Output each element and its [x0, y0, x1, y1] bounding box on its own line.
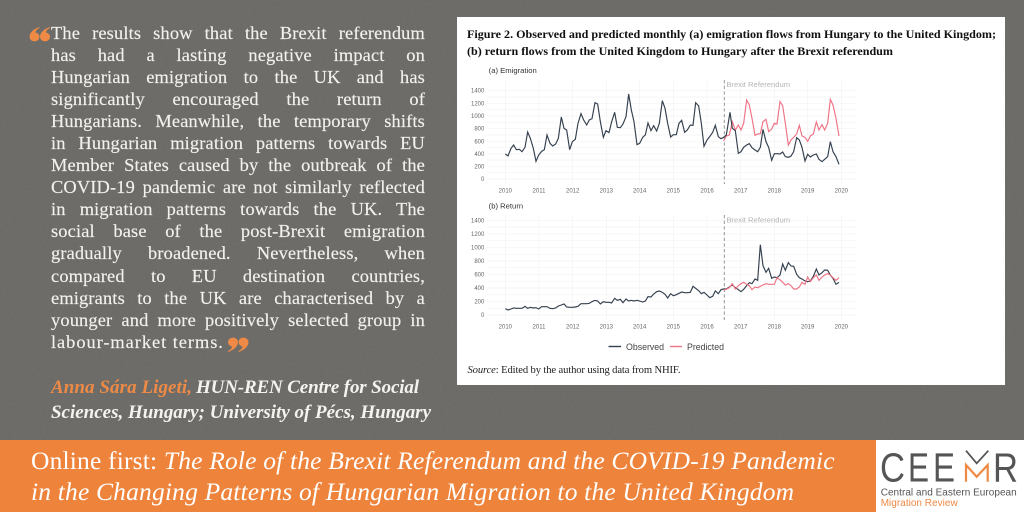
line chart: emigration: 2018	[768, 188, 782, 194]
line chart: return: 1400	[471, 218, 485, 224]
line chart: return: 2020	[835, 324, 849, 330]
line chart: emigration: 200	[474, 164, 485, 170]
line chart: emigration	[471, 66, 856, 194]
line chart: emigration: 2012	[566, 188, 580, 194]
line chart: emigration: 1200	[471, 101, 485, 107]
line chart: return: 2014	[633, 324, 647, 330]
icon: opening quotation mark	[30, 27, 50, 42]
line chart: emigration: 1000	[471, 114, 485, 120]
quote text block: The results show that the Brexit referendum	[51, 23, 425, 43]
banner title: in the Changing Patterns of Hungarian Migration to the United Kingdom	[31, 477, 794, 506]
line chart: emigration: Brexit Referendum	[726, 80, 790, 89]
author attribution	[50, 377, 432, 423]
logo: CEEMR: Central and Eastern European	[881, 488, 1017, 499]
quote text block: COVID-19 pandemic are not similarly reflected	[51, 177, 425, 197]
banner title	[31, 446, 835, 506]
quote text block: Member States caused by the outbreak of the	[51, 155, 425, 175]
logo: CEEMR: Migration Review	[881, 498, 958, 509]
icon: closing quotation mark	[228, 338, 248, 352]
quote text block: labour-market terms.	[51, 332, 224, 352]
line chart: return: 0	[481, 313, 485, 319]
logo: CEEMR: C	[880, 445, 905, 491]
line chart: emigration: 2020	[835, 188, 849, 194]
line chart: return: 2018	[768, 324, 782, 330]
line chart: return: 2016	[700, 324, 714, 330]
line chart: return: 2019	[801, 324, 815, 330]
line chart: return: 200	[474, 299, 485, 305]
author attribution: Sciences, Hungary; University of Pécs, Hungary	[51, 402, 432, 423]
quote text block: in migration patterns towards the UK. The	[51, 199, 425, 219]
chart legend: Observed	[626, 342, 664, 352]
banner title: Online first: The Role of the Brexit Referendum and the COVID-19 Pandemic	[31, 446, 835, 475]
quote text block: Hungarian emigration to the UK and has	[51, 67, 425, 87]
chart legend: Predicted	[687, 342, 724, 352]
chart legend	[608, 342, 724, 352]
figure title: Figure 2. Observed and predicted monthly (a) emigration flows from Hungary to the United Kingdom;	[467, 28, 996, 41]
line chart: return: 1200	[471, 232, 485, 238]
line chart: return: 2013	[600, 324, 614, 330]
logo: CEEMR: E	[933, 445, 955, 491]
line chart: emigration: 2014	[633, 188, 647, 194]
line chart: emigration: 2019	[801, 188, 815, 194]
line chart: return: 1000	[471, 246, 485, 252]
quote text block	[51, 23, 425, 352]
line chart: return	[471, 202, 856, 330]
quote text block: in Hungarian migration patterns towards EU	[51, 133, 425, 153]
line chart: emigration: (a) Emigration	[489, 66, 537, 75]
quote text block: emigrants to the UK are characterised by a	[51, 288, 425, 308]
line chart: return: (b) Return	[489, 202, 523, 211]
author attribution: Anna Sára Ligeti,	[50, 377, 192, 398]
logo: CEEMR: E	[908, 445, 929, 491]
line chart: emigration: 2016	[700, 188, 714, 194]
quote text block: Hungarians. Meanwhile, the temporary shifts	[51, 111, 425, 131]
line chart: return: 400	[474, 286, 485, 292]
author attribution: HUN-REN Centre for Social	[195, 377, 420, 398]
line chart: emigration: 2015	[667, 188, 681, 194]
line chart: emigration: 2011	[533, 188, 546, 194]
line chart: emigration: 0	[481, 177, 485, 183]
line chart: emigration: 2017	[734, 188, 748, 194]
logo: CEEMR	[876, 440, 1024, 512]
line chart: return: Brexit Referendum	[726, 216, 790, 225]
line chart: return: 600	[474, 272, 485, 278]
line chart: return: 2011	[533, 324, 546, 330]
orange banner	[0, 440, 876, 512]
source note: Source: Edited by the author using data from NHIF.	[468, 365, 680, 376]
figure title: (b) return flows from the United Kingdom to Hungary after the Brexit referendum	[467, 45, 893, 58]
figure title	[467, 28, 996, 58]
quote text block: younger and more positively selected group in	[51, 310, 425, 330]
quote text block: significantly encouraged the return of	[51, 89, 425, 109]
quote text block: compared to EU destination countries,	[51, 266, 425, 286]
line chart: return: 2010	[499, 324, 513, 330]
line chart: emigration: 600	[474, 139, 485, 145]
logo: CEEMR: R	[993, 445, 1018, 491]
quote text block: social base of the post-Brexit emigration	[51, 221, 425, 241]
quote text block: gradually broadened. Nevertheless, when	[51, 243, 425, 263]
line chart: emigration: 400	[474, 152, 485, 158]
line chart: return: 2017	[734, 324, 748, 330]
line chart: return: 2015	[667, 324, 681, 330]
quote text block: has had a lasting negative impact on	[51, 45, 425, 65]
line chart: emigration: 1400	[471, 89, 485, 95]
line chart: return: 2012	[566, 324, 580, 330]
line chart: emigration: 2013	[600, 188, 614, 194]
line chart: emigration: 2010	[499, 188, 513, 194]
panel: figure	[457, 17, 1005, 385]
line chart: return: 800	[474, 259, 485, 265]
line chart: emigration: 800	[474, 127, 485, 133]
